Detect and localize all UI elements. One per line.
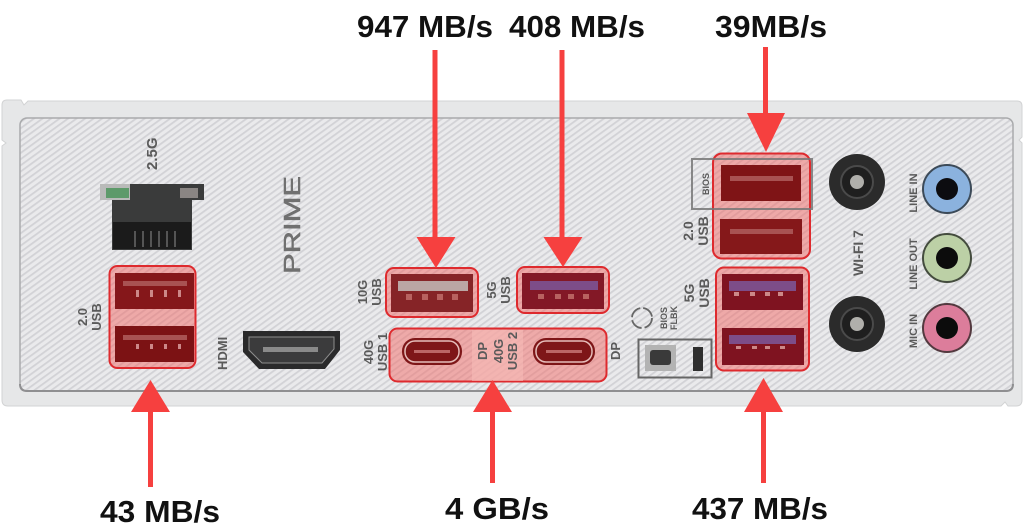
panel: BIOS outline: BIOS [701,173,711,195]
label: LINE OUT: LINE OUT [908,238,920,290]
label: USB 5G right: USB [696,278,712,308]
icon: HDMI port [243,331,340,369]
label: USB 10G: 10G [355,280,370,304]
label: BIOS FLBK: FLBK [669,306,679,330]
label: 437 MB/s: 437 MB/s [692,491,828,526]
label: USB 5G right: 5G [681,284,697,302]
icon: antenna connector bottom [829,296,885,352]
arrow: 437 MB/s [744,378,783,483]
panel: USB 5G port highlight [517,267,609,313]
label: LINE IN: LINE IN [908,173,920,213]
label: HDMI: HDMI [215,337,230,370]
label: WI-FI 7: WI-FI 7 [850,230,866,276]
icon: ethernet port [100,184,204,250]
label: USB 2.0 left: 2.0 [75,308,90,326]
arrow: 947 MB/s [416,50,456,268]
label: BIOS FLBK: BIOS [659,307,669,329]
label: USB 40G 1: USB 1 [375,333,390,371]
icon: blue audio jack [923,165,971,213]
label: USB 10G: USB [369,278,384,306]
icon: BIOS flashback button [638,340,712,378]
label: DP first: DP [475,342,490,360]
panel: USB 10G port highlight [386,268,478,317]
label: USB 5G middle: 5G [484,281,499,299]
icon: green audio jack [923,234,971,282]
label: 4 GB/s: 4 GB/s [445,491,549,526]
label: USB 2.0 left: USB [89,303,104,331]
panel: rear USB 2.0 ports highlight [110,266,196,368]
label: USB 5G middle: USB [498,276,513,304]
label: DP second: DP [608,342,623,360]
panel: IO shield plate [2,100,1022,406]
label: 947 MB/s: 947 MB/s [357,9,493,44]
arrow: 4 GB/s [473,380,512,483]
arrow: 43 MB/s [131,380,170,487]
panel: right USB 5G ports highlight [716,268,809,370]
label: 408 MB/s: 408 MB/s [509,9,645,44]
label: USB 2.0 right: 2.0 [680,221,696,241]
label: USB 40G 1: 40G [361,340,376,364]
label: USB 2.0 right: USB [695,216,711,246]
arrow: 408 MB/s [544,50,582,267]
label: 43 MB/s: 43 MB/s [100,494,220,529]
label: USB 40G 2: 40G [491,339,506,363]
icon: BIOS flashback arrows [632,308,652,328]
panel: right USB 2.0 ports highlight [713,154,810,258]
icon: antenna connector top [829,154,885,210]
label: MIC IN: MIC IN [908,314,920,348]
label: USB 40G 2: USB 2 [505,332,520,370]
label: 39MB/s: 39MB/s [715,9,827,44]
label: PRIME: PRIME [279,176,305,274]
panel: USB-C ports highlight [390,328,606,382]
panel: BIOS outline [692,159,812,209]
label: 2.5G: 2.5G [144,137,161,170]
icon: pink audio jack [923,304,971,352]
arrow: 39MB/s [747,47,785,152]
